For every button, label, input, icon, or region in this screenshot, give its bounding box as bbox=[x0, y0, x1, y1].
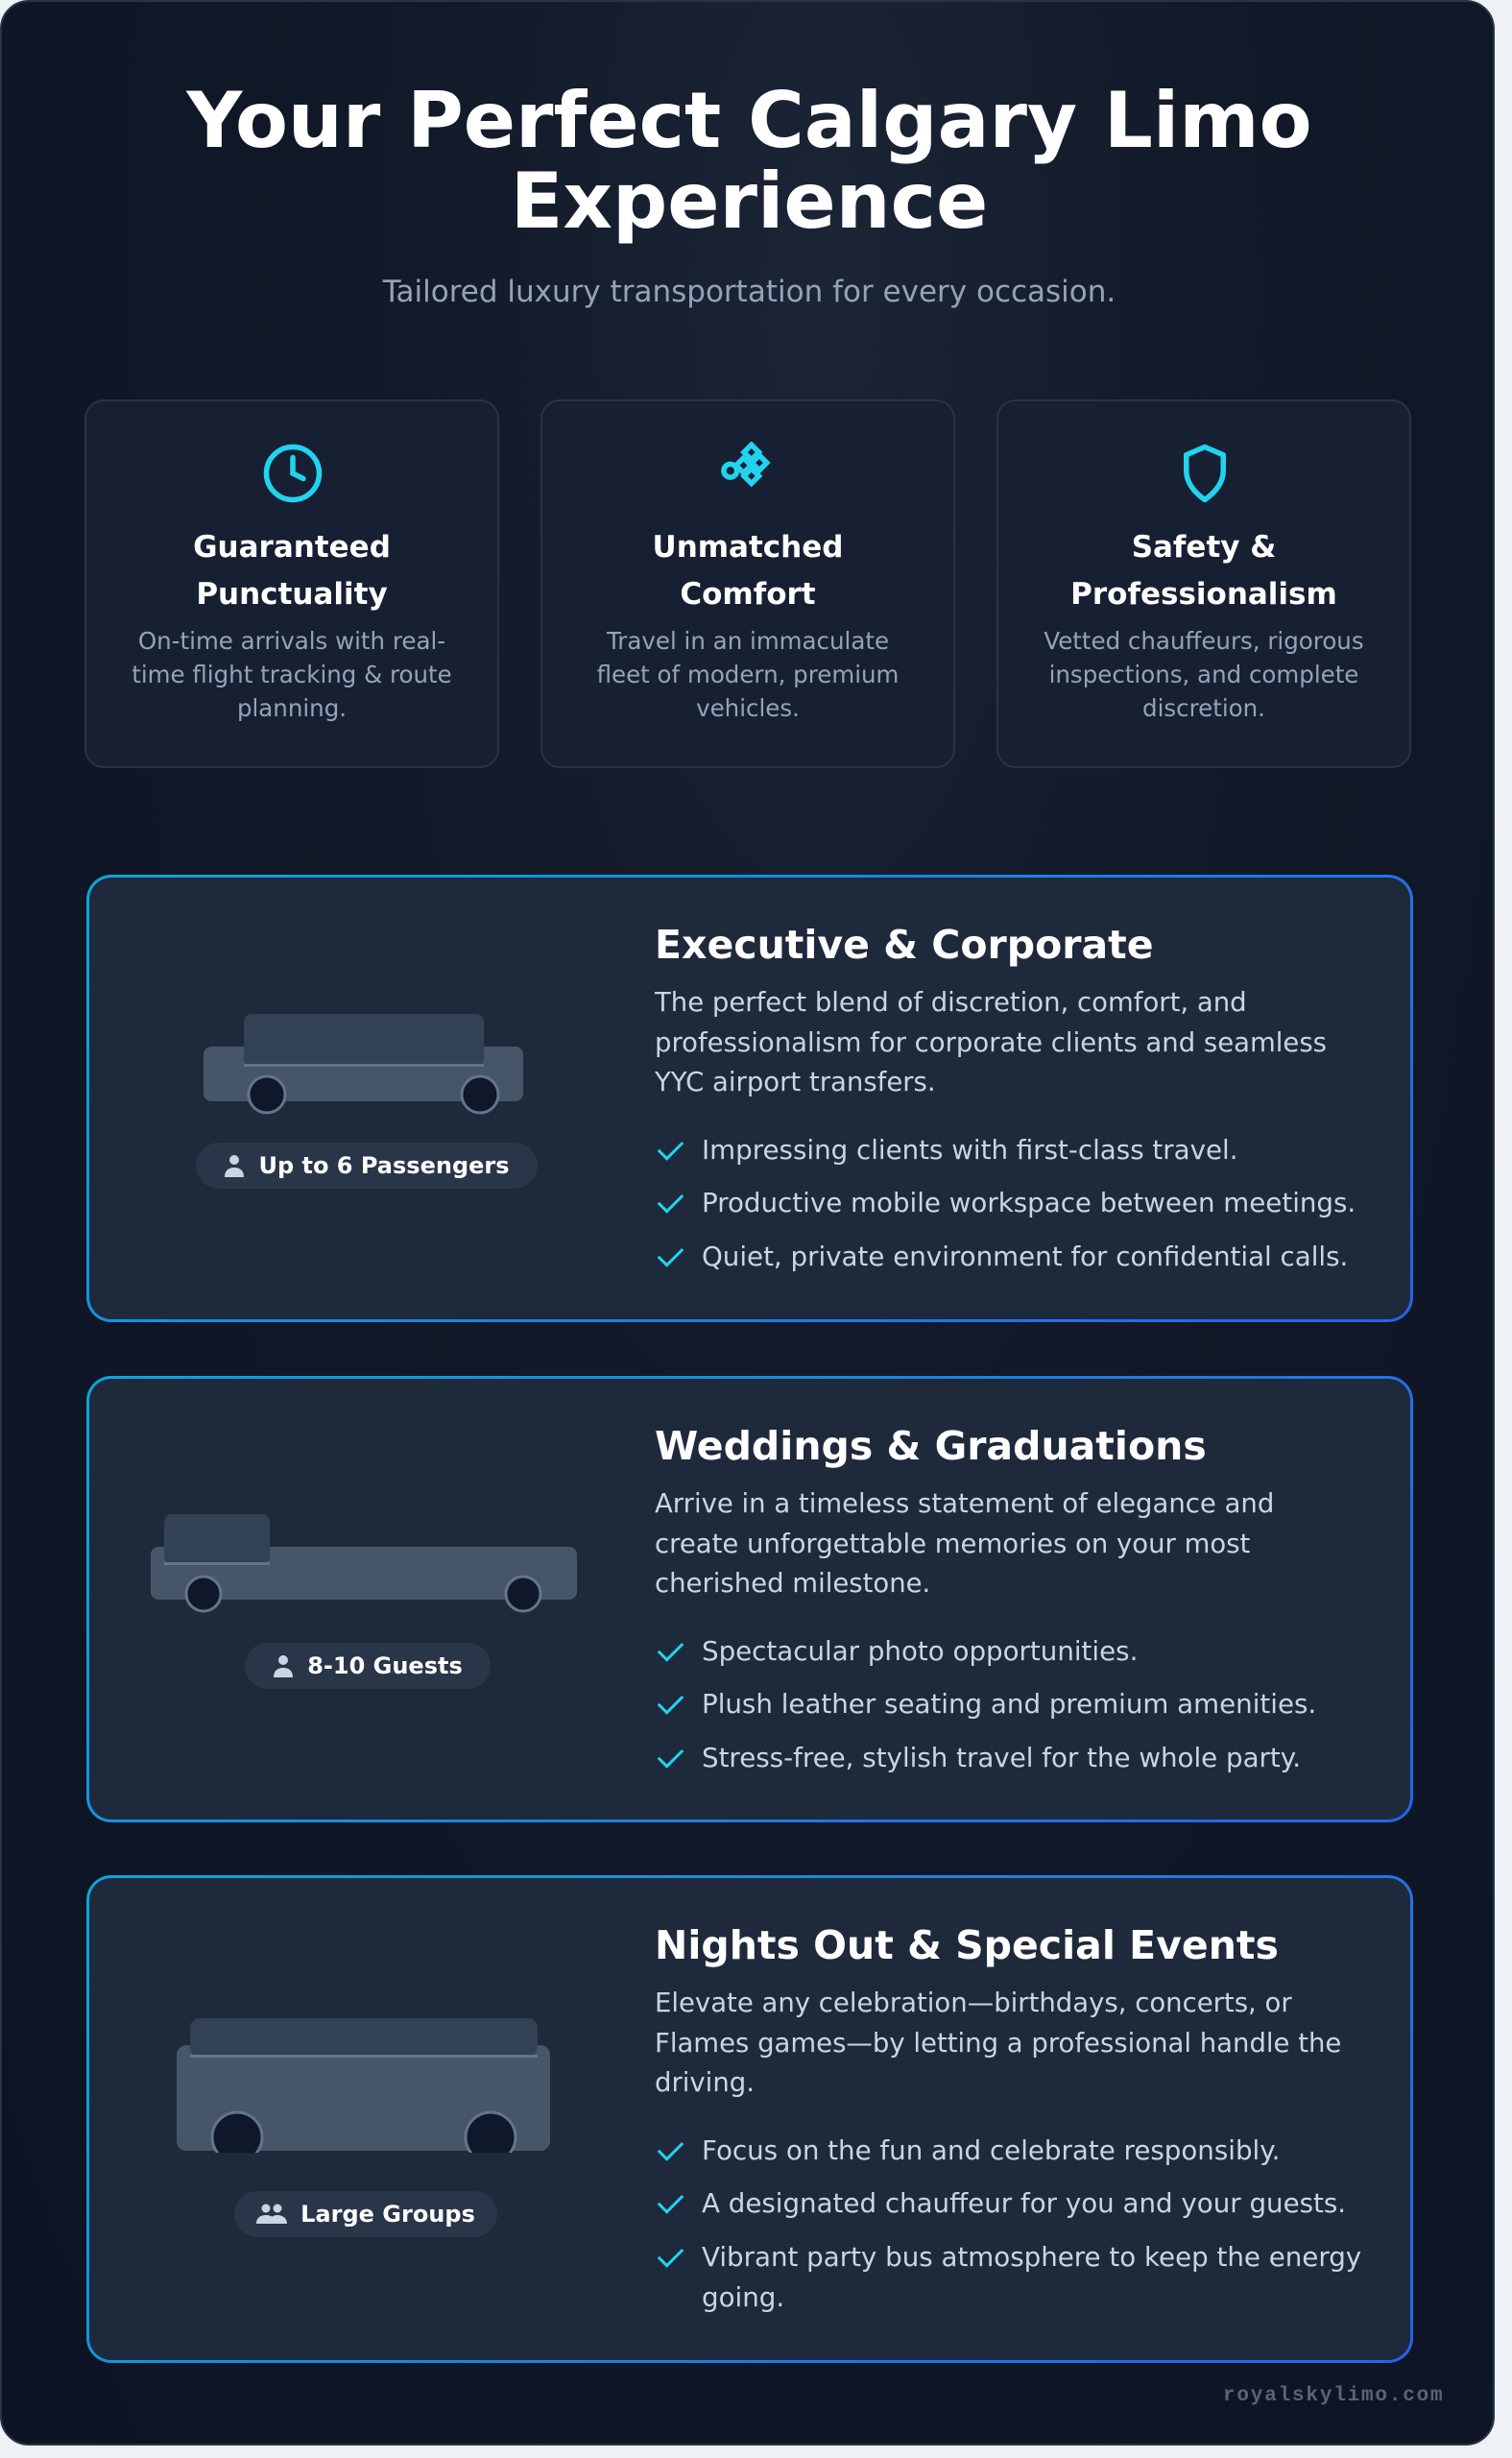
badge: guests: 8-10 Guests bbox=[307, 1652, 463, 1679]
text block: Focus on the fun and celebrate responsibly. bbox=[702, 2134, 1280, 2166]
icon: shield bbox=[1184, 444, 1226, 503]
icon: comfort bbox=[721, 442, 770, 488]
feature card: comfort: Comfort bbox=[680, 577, 816, 612]
text block: Spectacular photo opportunities. bbox=[702, 1635, 1138, 1667]
text block: Vibrant party bus atmosphere to keep the energy going. bbox=[702, 2241, 1361, 2313]
badge: guests bbox=[245, 1643, 491, 1689]
icon: clock bbox=[263, 444, 323, 503]
feature card: comfort: Travel in an immaculate fleet of modern, premium vehicles. bbox=[597, 627, 899, 722]
icon: limousine bbox=[151, 1514, 577, 1613]
text block: The perfect blend of discretion, comfort, and professionalism for corporate clients and seamless YYC airport transfers. bbox=[655, 987, 1327, 1097]
title: Your Perfect Calgary Limo bbox=[186, 76, 1312, 165]
feature card: safety: Professionalism bbox=[1070, 577, 1337, 612]
text block: Arrive in a timeless statement of elegance and create unforgettable memories on your most cherished milestone. bbox=[655, 1488, 1274, 1599]
text block: Executive & Corporate bbox=[655, 922, 1154, 968]
text block: Nights Out & Special Events bbox=[655, 1922, 1279, 1968]
feature card: comfort: Unmatched bbox=[653, 530, 843, 565]
feature card: punctuality: Guaranteed bbox=[193, 530, 391, 565]
title bbox=[186, 76, 1312, 246]
icon: party bus bbox=[177, 2018, 550, 2153]
text block: Elevate any celebration—birthdays, concerts, or Flames games—by letting a professional handle the driving. bbox=[655, 1988, 1341, 2098]
text block: Weddings & Graduations bbox=[655, 1423, 1207, 1469]
feature card: punctuality: Punctuality bbox=[196, 577, 388, 612]
subtitle: Tailored luxury transportation for every occasion. bbox=[383, 275, 1116, 309]
text block bbox=[655, 922, 1356, 1272]
text block: Impressing clients with first-class travel. bbox=[702, 1134, 1238, 1166]
text block: Plush leather seating and premium amenities. bbox=[702, 1688, 1316, 1720]
text block: A designated chauffeur for you and your guests. bbox=[702, 2187, 1346, 2219]
feature card: safety: Safety & bbox=[1132, 530, 1276, 565]
text block: Quiet, private environment for confidential calls. bbox=[702, 1241, 1348, 1272]
badge: passengers: Up to 6 Passengers bbox=[258, 1152, 510, 1179]
text block: Stress-free, stylish travel for the whole party. bbox=[702, 1742, 1301, 1773]
panel: executive & corporate bbox=[86, 875, 1413, 1322]
feature card: comfort bbox=[540, 399, 955, 768]
feature card: punctuality: On-time arrivals with real-time flight tracking & route planning. bbox=[132, 627, 452, 722]
text block bbox=[655, 1423, 1316, 1773]
text block: Productive mobile workspace between meetings. bbox=[702, 1187, 1356, 1218]
text block bbox=[655, 1922, 1361, 2313]
feature card: safety bbox=[996, 399, 1411, 768]
feature card: safety: Vetted chauffeurs, rigorous inspections, and complete discretion. bbox=[1044, 627, 1364, 722]
badge: large groups bbox=[234, 2191, 497, 2237]
panel: nights out bbox=[86, 1875, 1413, 2363]
title: Experience bbox=[511, 157, 988, 246]
panel: weddings bbox=[86, 1376, 1413, 1822]
badge: large groups: Large Groups bbox=[300, 2201, 475, 2228]
icon: sedan bbox=[204, 1014, 523, 1114]
feature card: punctuality bbox=[84, 399, 499, 768]
badge: passengers bbox=[196, 1143, 538, 1189]
footer url: royalskylimo.com bbox=[1223, 2385, 1444, 2407]
